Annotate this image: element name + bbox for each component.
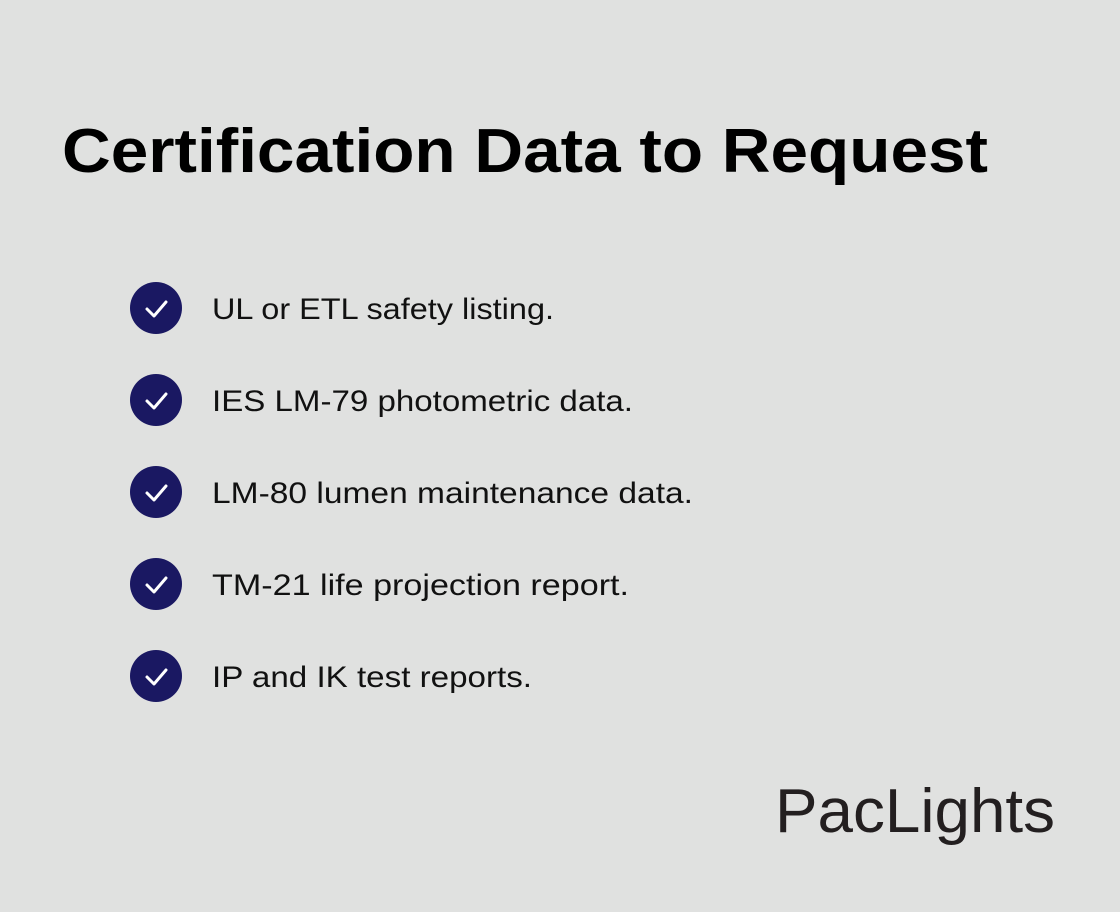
item 5 [130,650,532,702]
item 2 [130,374,633,426]
icon: check circle [130,466,182,518]
item 5: IP and IK test reports. [212,661,532,694]
item 4 [130,558,629,610]
item 4: TM-21 life projection report. [212,569,629,602]
item 3: LM-80 lumen maintenance data. [212,477,693,510]
icon: check circle [130,282,182,334]
icon: check circle [130,374,182,426]
icon: check circle [130,558,182,610]
icon: check circle [130,650,182,702]
checklist [130,282,693,702]
item 1: UL or ETL safety listing. [212,293,554,326]
item 1 [130,282,554,334]
item 2: IES LM-79 photometric data. [212,385,633,418]
item 3 [130,466,693,518]
title: Certification Data to Request [62,117,988,186]
logo: PacLights: PacLights [775,777,1055,846]
